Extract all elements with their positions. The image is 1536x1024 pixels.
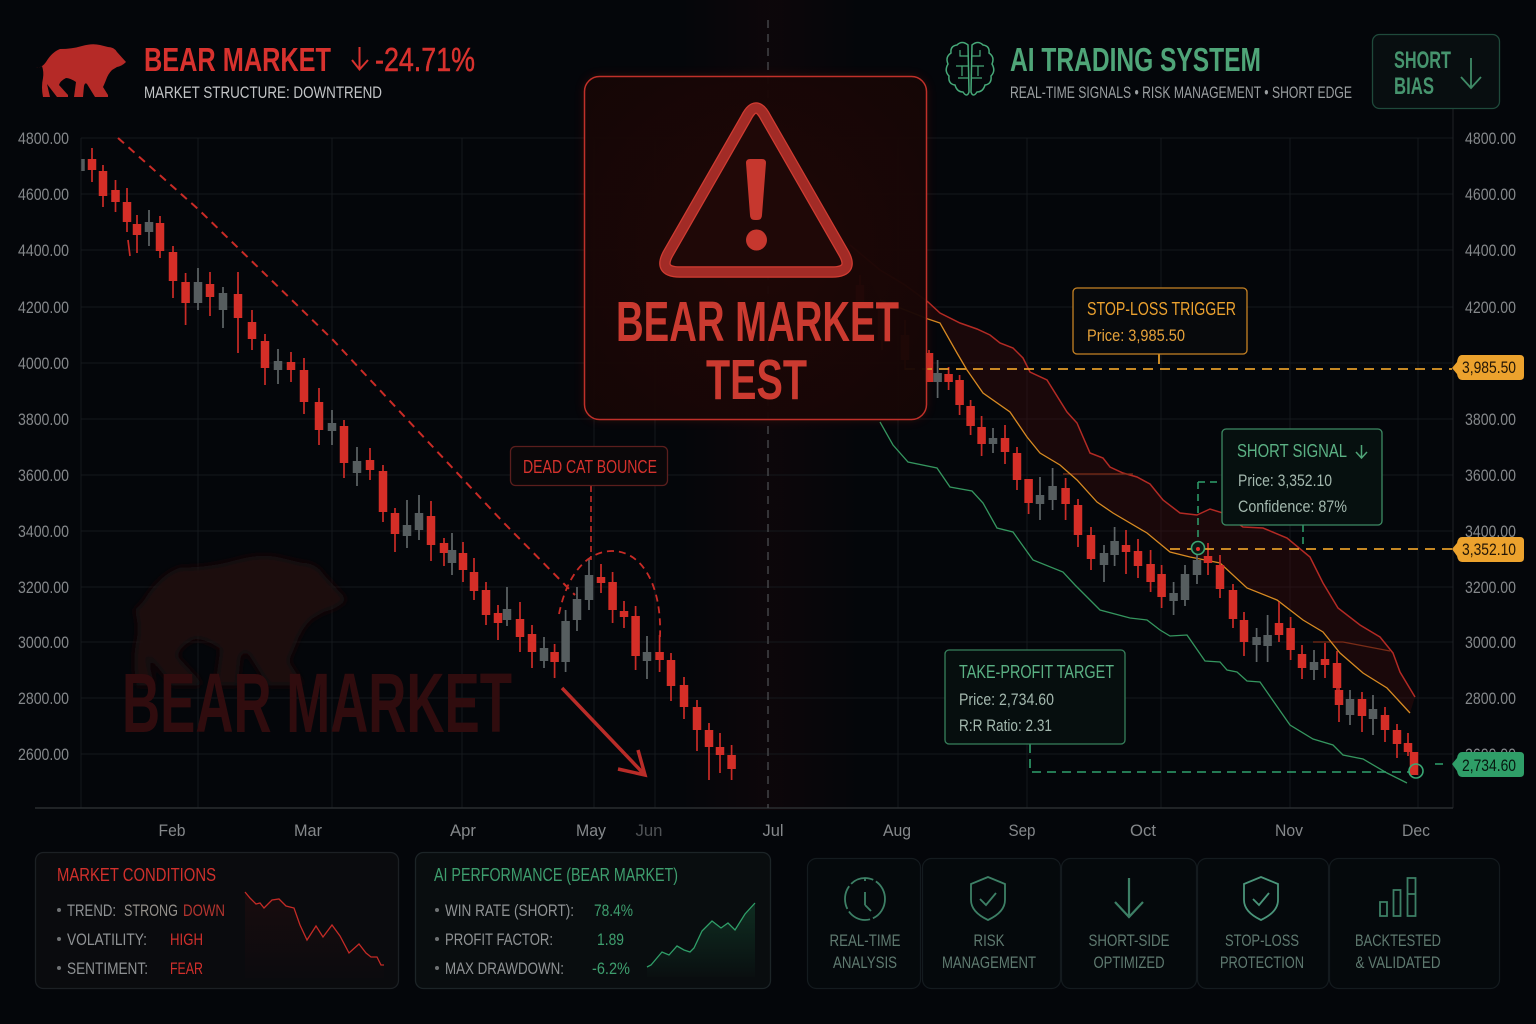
callout: stop-loss trigger: Price: 3,985.50 — [1087, 326, 1185, 345]
feature: risk management: RISK — [974, 931, 1005, 950]
take-profit connector lines — [1030, 744, 1443, 772]
feature: real-time analysis: ANALYSIS — [833, 953, 897, 972]
warning panel — [584, 76, 927, 420]
subtitle: MARKET STRUCTURE: DOWNTREND — [144, 83, 382, 102]
right candlestick chart — [860, 275, 1414, 775]
resistance trend line — [118, 138, 575, 595]
watermark: bear market text: BEAR MARKET — [122, 656, 512, 750]
icon: brain — [946, 42, 994, 95]
callout: short signal — [1222, 429, 1382, 525]
left candles: gray bodies — [149, 222, 647, 662]
heading: MARKET CONDITIONS — [57, 864, 216, 885]
callout: dead cat bounce: DEAD CAT BOUNCE — [523, 457, 657, 477]
marker: short signal entry — [1192, 542, 1204, 554]
metric: max drawdown: -6.2% — [592, 959, 630, 978]
feature: stop-loss protection — [1198, 858, 1328, 988]
time axis months: Oct — [1130, 821, 1156, 840]
metric: trend: DOWN — [183, 901, 225, 920]
time axis months: Apr — [450, 821, 476, 840]
left price axis: 4200.00 — [18, 299, 69, 317]
callout: dead cat bounce — [510, 446, 668, 560]
panel body — [584, 76, 926, 420]
metric: win rate: WIN RATE (SHORT): — [445, 901, 574, 920]
feature: short-side optimized — [1062, 858, 1196, 988]
right candles: red bodies — [860, 285, 1414, 775]
feature: real-time analysis — [808, 858, 920, 988]
feature: real-time analysis: REAL-TIME — [830, 931, 900, 950]
short signal connector lines — [1198, 482, 1303, 549]
callout: stop-loss trigger — [1073, 288, 1247, 354]
callout: short signal: SHORT SIGNAL — [1237, 440, 1347, 461]
short bias badge — [1372, 34, 1500, 108]
icon: down arrow — [1115, 878, 1143, 917]
marker: take-profit hit — [1409, 764, 1423, 778]
left price axis: 3400.00 — [18, 523, 69, 541]
metric: profit factor: PROFIT FACTOR: — [445, 930, 553, 949]
price tag: stop-loss — [1452, 355, 1524, 380]
left price axis: 3200.00 — [18, 579, 69, 597]
callout: stop-loss trigger: STOP-LOSS TRIGGER — [1087, 298, 1236, 319]
callout: take-profit target — [945, 650, 1125, 744]
chart: red sparkline — [245, 892, 384, 978]
icon: warning triangle — [665, 108, 847, 272]
left price axis — [18, 130, 69, 764]
metric: trend — [67, 901, 225, 920]
feature: stop-loss protection: STOP-LOSS — [1225, 931, 1299, 950]
right price axis: 2600.00 — [1465, 746, 1516, 764]
callout: short signal: Price: 3,352.10 — [1238, 471, 1332, 490]
icon: shield — [1244, 877, 1278, 920]
left price axis: 3800.00 — [18, 411, 69, 429]
right price axis: 3600.00 — [1465, 467, 1516, 485]
price tag: take-profit — [1452, 752, 1524, 777]
left candles: red wicks — [92, 148, 732, 780]
percent change: -24.71% — [375, 41, 475, 78]
time axis months: Sep — [1008, 821, 1036, 840]
right price axis: 3200.00 — [1465, 579, 1516, 597]
right price axis: 2800.00 — [1465, 690, 1516, 708]
feature: backtested and validated: & VALIDATED — [1356, 953, 1440, 972]
dead cat bounce arc — [559, 551, 660, 637]
watermark: bear silhouette — [119, 556, 347, 686]
feature: short-side optimized: SHORT-SIDE — [1088, 931, 1170, 950]
right chart: orange moving average — [880, 300, 1410, 713]
right price axis: 4800.00 — [1465, 130, 1516, 148]
panel glow — [584, 76, 927, 420]
metric: win rate: 78.4% — [594, 901, 633, 920]
time axis months: Aug — [883, 821, 911, 840]
short signal level line — [1170, 548, 1452, 550]
header right: ai trading system — [946, 41, 1352, 102]
icon: clock — [845, 878, 885, 920]
left price axis: 4000.00 — [18, 355, 69, 373]
callout: take-profit target: Price: 2,734.60 — [959, 690, 1054, 709]
feature: short-side optimized: OPTIMIZED — [1094, 953, 1164, 972]
metric: profit factor: 1.89 — [597, 930, 624, 949]
metric: volatility: VOLATILITY: — [67, 930, 147, 949]
right chart: red upper band line — [850, 245, 1415, 697]
left candlestick chart — [83, 148, 732, 780]
right price axis: 3400.00 — [1465, 523, 1516, 541]
right candles: gray bodies — [938, 373, 1373, 719]
icon: down arrow — [1356, 445, 1367, 458]
chart: green sparkline — [647, 903, 755, 977]
right candles: red wicks — [860, 275, 1414, 775]
icon: bar chart — [1380, 878, 1416, 916]
metric: trend: STRONG — [124, 901, 178, 920]
short bias badge: BIAS — [1394, 73, 1434, 100]
metric: trend: TREND: — [67, 901, 116, 920]
time axis months: Nov — [1275, 821, 1303, 840]
icon: shield — [971, 877, 1005, 920]
price tag: short signal — [1452, 537, 1524, 562]
right candles: gray wicks — [938, 360, 1373, 735]
icon: down arrow — [352, 47, 368, 70]
icon: bear — [36, 44, 126, 97]
left price axis: 4800.00 — [18, 130, 69, 148]
icon: down arrow — [1461, 58, 1481, 88]
panel: market conditions — [36, 852, 398, 988]
title: AI TRADING SYSTEM — [1010, 41, 1261, 78]
heading: AI PERFORMANCE (BEAR MARKET) — [434, 864, 678, 885]
time axis months: Dec — [1402, 821, 1430, 840]
panel title: bear market: BEAR MARKET — [616, 290, 899, 354]
callout: short signal: Confidence: 87% — [1238, 497, 1347, 516]
title: BEAR MARKET — [144, 41, 331, 78]
time axis months: May — [576, 821, 606, 840]
price tag: take-profit: 2,734.60 — [1462, 757, 1516, 775]
panel title: test: TEST — [706, 348, 807, 412]
left price axis: 4400.00 — [18, 242, 69, 260]
left price axis: 3600.00 — [18, 467, 69, 485]
left candles: clipped first candle — [81, 159, 85, 171]
subtitle: REAL-TIME SIGNALS • RISK MANAGEMENT • SHORT EDGE — [1010, 84, 1352, 102]
feature: stop-loss protection: PROTECTION — [1220, 953, 1304, 972]
right chart: red band area — [850, 245, 1415, 713]
time axis months — [158, 821, 1430, 840]
left price axis: 2800.00 — [18, 690, 69, 708]
right price axis: 3800.00 — [1465, 411, 1516, 429]
price tag: short signal: 3,352.10 — [1462, 541, 1516, 559]
metric: sentiment: SENTIMENT: — [67, 959, 148, 978]
metric: volatility: HIGH — [170, 930, 203, 949]
left price axis: 3000.00 — [18, 634, 69, 652]
left candles: red bodies — [92, 159, 732, 769]
metric: max drawdown: MAX DRAWDOWN: — [445, 959, 564, 978]
left price axis: 4600.00 — [18, 186, 69, 204]
right price axis: 4600.00 — [1465, 186, 1516, 204]
feature: risk management — [922, 858, 1060, 988]
callout: take-profit target: R:R Ratio: 2.31 — [959, 716, 1052, 735]
left candles: gray wicks — [149, 210, 647, 679]
time axis months: Mar — [294, 821, 322, 840]
price tag: stop-loss: 3,985.50 — [1462, 359, 1516, 377]
right chart: green lower band — [880, 422, 1407, 783]
left price axis: 2600.00 — [18, 746, 69, 764]
arrow: downward move — [562, 688, 645, 775]
right price axis: 4400.00 — [1465, 242, 1516, 260]
right price axis: 4200.00 — [1465, 299, 1516, 317]
panel: ai performance — [416, 852, 770, 988]
stop-loss level line — [905, 354, 1452, 369]
right price axis — [1465, 130, 1516, 764]
header left: bear market — [36, 41, 475, 102]
divider: left and right chart — [767, 20, 769, 808]
right price axis: 3000.00 — [1465, 634, 1516, 652]
time axis months: Jun — [636, 821, 662, 840]
bullets — [435, 910, 439, 968]
time axis months: Jul — [762, 821, 784, 840]
feature: risk management: MANAGEMENT — [942, 953, 1036, 972]
short bias badge: SHORT — [1394, 47, 1451, 74]
right chart: secondary band segment — [1063, 474, 1390, 651]
callout: take-profit target: TAKE-PROFIT TARGET — [959, 661, 1114, 682]
time axis months: Feb — [158, 821, 186, 840]
chart grid — [35, 105, 1453, 808]
bullets — [57, 910, 61, 968]
feature: backtested and validated — [1330, 858, 1500, 988]
metric: sentiment: FEAR — [170, 959, 203, 978]
feature: backtested and validated: BACKTESTED — [1355, 931, 1441, 950]
